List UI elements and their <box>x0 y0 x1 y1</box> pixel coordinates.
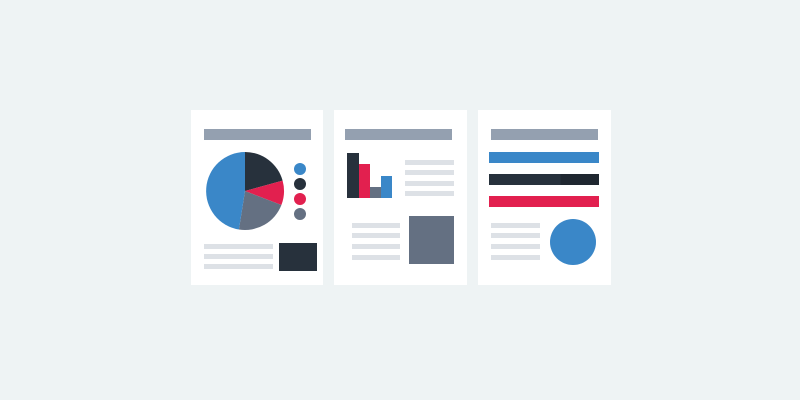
panel: pie chart report <box>191 110 323 285</box>
text lines <box>204 244 273 269</box>
title bar <box>345 129 452 140</box>
text lines <box>491 223 540 260</box>
dark image block <box>279 243 317 271</box>
title bar <box>491 129 598 140</box>
bar chart <box>347 153 392 198</box>
title bar <box>204 129 311 140</box>
pie chart <box>206 152 306 230</box>
panel: horizontal bars report <box>478 110 611 285</box>
horizontal bars <box>489 152 599 207</box>
text lines bottom <box>352 223 400 260</box>
gray image block <box>409 216 454 264</box>
text lines right <box>405 160 454 196</box>
blue circle <box>550 219 596 265</box>
panel: bar chart report <box>334 110 467 285</box>
